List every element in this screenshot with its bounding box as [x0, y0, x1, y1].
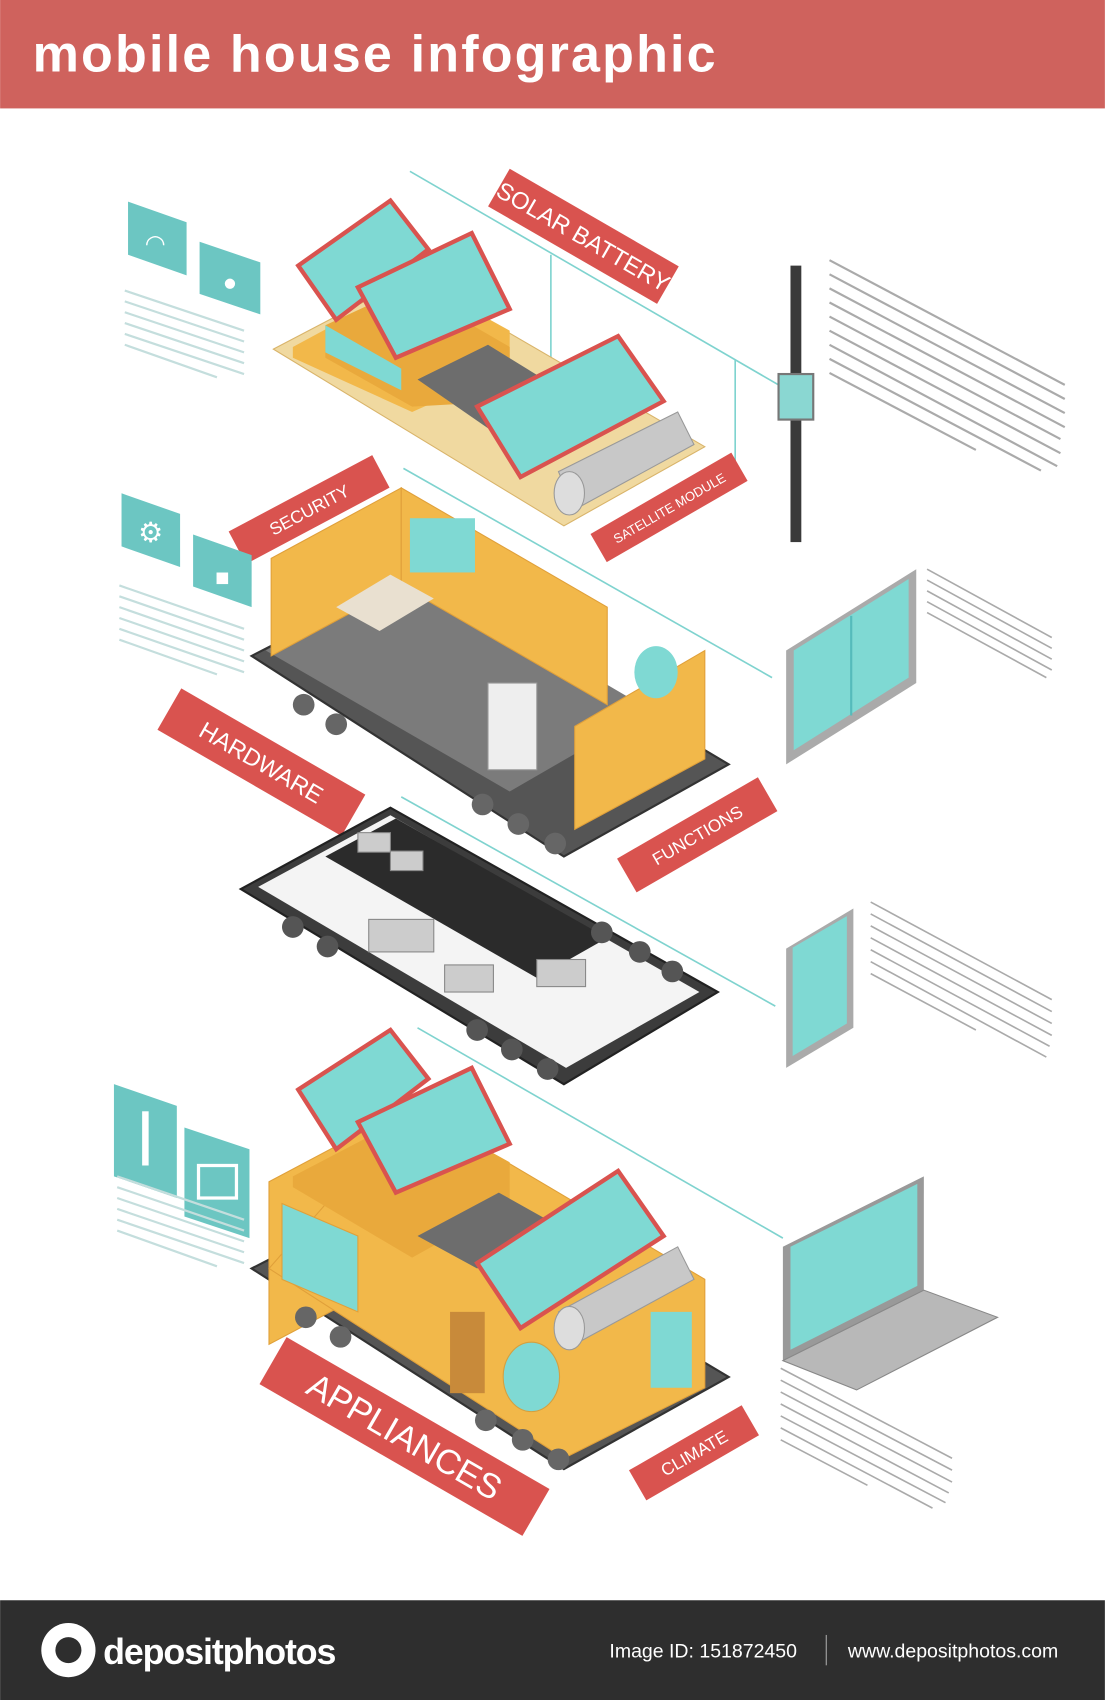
label: appliances	[260, 1337, 550, 1536]
icons: thermometer and microwave	[114, 1084, 249, 1238]
text block left 3	[117, 1176, 244, 1266]
footer url: www.depositphotos.com	[847, 1641, 1058, 1663]
text block right 3	[871, 902, 1052, 1057]
chassis: hardware frame	[241, 808, 718, 1084]
icons: wifi and bulb: ◠	[145, 231, 166, 258]
footer band	[0, 1600, 1105, 1700]
text block left 1	[125, 291, 244, 377]
watch device	[779, 266, 813, 542]
label: security	[229, 455, 390, 564]
label: appliances: APPLIANCES	[300, 1366, 508, 1508]
icons: gear and lock: ■	[215, 564, 230, 591]
phone device	[786, 909, 853, 1068]
solar roof panels	[298, 201, 428, 320]
label: solar battery: SOLAR BATTERY	[492, 177, 674, 298]
icons: wifi and bulb: ●	[223, 270, 237, 297]
label: functions: FUNCTIONS	[649, 801, 746, 869]
label: climate: CLIMATE	[657, 1426, 731, 1480]
house 2: interior	[252, 488, 729, 857]
label: functions	[617, 777, 777, 892]
text block right 1	[830, 260, 1065, 471]
footer logo: depositphotos	[103, 1632, 336, 1672]
solar roof panels	[298, 1030, 428, 1149]
connector lines	[401, 171, 783, 1238]
text block left 2	[119, 585, 244, 674]
label: hardware: HARDWARE	[194, 717, 327, 809]
tablet device	[786, 569, 916, 764]
footer logo	[41, 1623, 336, 1677]
icons: gear and lock	[122, 493, 252, 607]
house 4: full mobile house	[252, 1030, 729, 1470]
text block right 2	[927, 569, 1052, 678]
label: hardware	[157, 688, 365, 836]
footer image id: Image ID: 151872450	[609, 1641, 797, 1663]
icons: gear and lock: ⚙	[138, 516, 163, 548]
satellite roll	[554, 412, 694, 515]
header band	[0, 0, 1105, 108]
label: satellite module	[590, 453, 748, 562]
label: climate	[629, 1405, 759, 1500]
title: mobile house infographic	[33, 26, 718, 84]
label: security: SECURITY	[266, 480, 353, 539]
laptop device	[783, 1176, 998, 1390]
house 1: solar roof	[273, 201, 705, 526]
icons: wifi and bulb	[128, 202, 260, 314]
label: satellite module: SATELLITE MODULE	[611, 470, 728, 546]
text block right 4	[781, 1368, 952, 1508]
